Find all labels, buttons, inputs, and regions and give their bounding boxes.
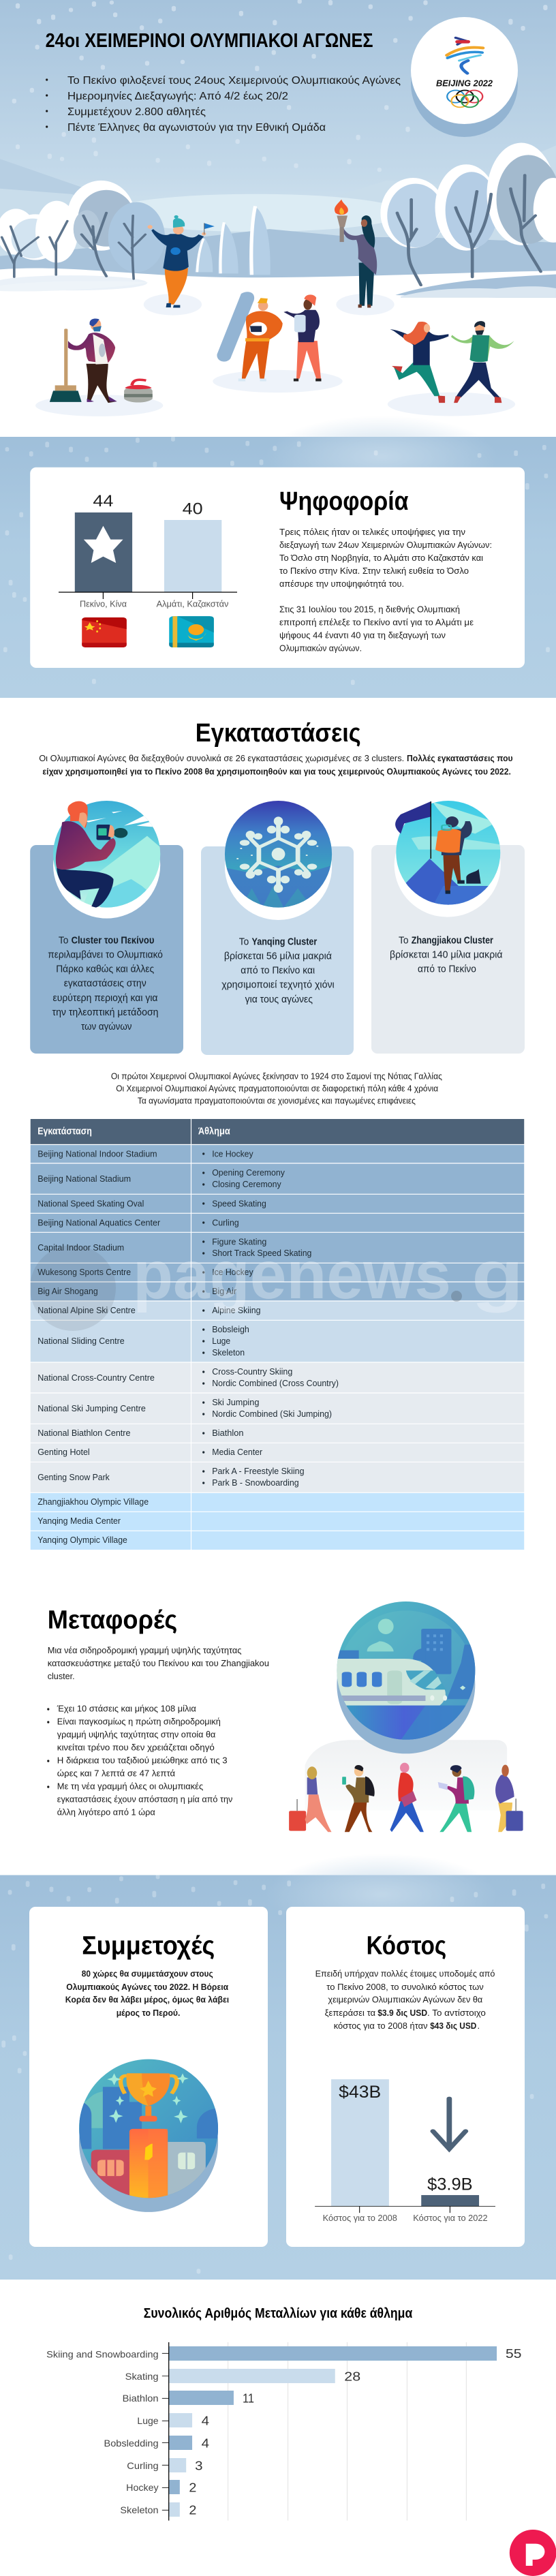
voting card [30,467,525,668]
panel: participation [29,1907,268,2247]
participation text [65,1969,230,2018]
heading: venues: Εγκαταστάσεις [196,719,361,748]
table sports list: Curling [212,1217,239,1227]
cluster card: Beijing [30,801,183,1054]
table sports list: Park B - Snowboarding [212,1477,299,1488]
icon: flag of China [82,617,127,647]
illustration: travellers [289,1763,523,1832]
cost text: . Το αντίστοιχο [427,2008,486,2018]
cluster card: Zhangjiakou [371,801,525,1054]
table sports list: Cross-Country Skiing [212,1366,292,1377]
band background with snow [0,1854,556,2280]
table venue names: National Speed Skating Oval [37,1198,144,1208]
cluster text: Beijing: Cluster του Πεκίνου [72,934,155,946]
cluster text: Beijing: Πάρκο καθώς και άλλες [56,964,154,975]
table sports list: Figure Skating [212,1236,266,1246]
bar chart: cost comparison: $3.9B [427,2175,473,2194]
winter olympics facts [111,1071,442,1106]
bar chart: medals by sport: 11 [243,2391,254,2405]
bar chart: host city vote: 40 [183,500,203,518]
table row backgrounds [30,1119,525,1550]
title: 24οι ΧΕΙΜΕΡΙΝΟΙ ΟΛΥΜΠΙΑΚΟΙ ΑΓΩΝΕΣ [46,30,373,52]
participation and cost section [0,1854,556,2280]
cluster card: Yanqing [201,801,354,1055]
table sports list: Luge [212,1336,230,1346]
cost text: $3.9 δις USD [377,2008,427,2018]
cluster text: Zhangjiakou: Zhangjiakou Cluster [412,934,493,946]
table venue names: Beijing National Stadium [37,1174,131,1184]
table sports list: Ice Hockey [212,1148,253,1159]
table venue names: National Biathlon Centre [37,1428,131,1438]
cluster text: Yanqing: χρησιμοποιεί τεχνητό χιόνι [221,979,335,991]
table header: Εγκατάσταση [37,1126,92,1137]
panel: cost [286,1907,525,2247]
cost text: χειμερινών Ολυμπιακών Αγώνων δεν θα [328,1995,483,2005]
table sports list: Ski Jumping [212,1397,259,1407]
cluster text: Yanqing: για τους αγώνες [245,994,313,1005]
arrow: cost reduction [433,2098,465,2149]
table venue names: Wukesong Sports Centre [37,1267,131,1277]
transport bullets: γραμμή υψηλής ταχύτητας στην οποία θα [57,1730,216,1740]
icon: publisher P logo [510,2530,556,2576]
table header [37,1126,230,1137]
bar chart: medals by sport: Skeleton [120,2504,159,2515]
watermark [30,1245,518,1331]
table sports list: Opening Ceremony [212,1167,285,1178]
bar chart: host city vote: Αλμάτι, Καζακστάν [157,598,229,609]
bar chart: medals by sport: Skating [125,2371,159,2382]
participation text: Ολυμπιακούς Αγώνες του 2022. Η Βόρεια [66,1982,228,1992]
hero scene [0,0,556,423]
bar chart: medals by sport: 55 [506,2347,521,2361]
venues section [30,719,556,1550]
table sports list: Short Track Speed Skating [212,1248,311,1258]
cluster text: Yanqing: Το [239,936,249,947]
transport intro [48,1645,269,1681]
bar chart: medals by sport: Luge [137,2415,159,2426]
heading: transport: Μεταφορές [48,1606,177,1634]
winter olympics facts: Οι Χειμερινοί Ολυμπιακοί Αγώνες πραγματοποιούνται σε διαφορετική πόλη κάθε 4 χρόνια [116,1084,439,1094]
key facts list: Συμμετέχουν 2.800 αθλητές [67,106,206,118]
watermark: pagenews [133,1237,451,1313]
key facts list: Ημερομηνίες Διεξαγωγής: Από 4/2 έως 20/2 [67,91,288,102]
table venue names: Yanqing Olympic Village [37,1535,127,1545]
key facts list: Πέντε Έλληνες θα αγωνιστούν για την Εθνική Ομάδα [67,122,326,134]
cluster text: Zhangjiakou: Το [399,934,409,946]
table sports list: Alpine Skiing [212,1305,260,1315]
cluster text: Beijing: ευρύτερη περιοχή και για [53,992,158,1004]
table sports list: Skeleton [212,1347,245,1358]
voting text [279,527,492,654]
participation text: μέρος το Περού. [117,2008,180,2018]
table venue names: Beijing National Indoor Stadium [37,1148,157,1159]
table venue names: National Ski Jumping Centre [37,1403,146,1413]
table sports list: Park A - Freestyle Skiing [212,1466,304,1476]
Beijing 2022 logo badge: BEIJING 2022 [436,78,493,89]
venues intro text: είχαν χρησιμοποιηθεί για το Πεκίνο 2008 θα χρησιμοποιηθούν και για τους χειμερινούς Ολυμπιακούς Αγώνες του 2022. [42,767,511,777]
table venue names: Zhangjiakhou Olympic Village [37,1497,149,1507]
figure: curler with broom and stone [35,319,163,416]
transport bullets: εγκαταστάσεις έχουν απόσταση η μία από την [57,1794,232,1805]
voting text: απέσυρε την υποψηφιότητά του. [279,579,404,589]
voting text: ψήφους 44 έναντι 40 για τη διεξαγωγή των [279,630,446,641]
icon: Beijing 2022 emblem [447,37,483,74]
table venue names [37,1148,161,1545]
bar chart: cost comparison: Κόστος για το 2008 [323,2213,397,2223]
bar chart: medals by sport: 2 [189,2504,196,2517]
transport intro: Μια νέα σιδηροδρομική γραμμή υψηλής ταχύτητας [48,1645,241,1655]
illustration: high-speed train [305,1601,507,1787]
medals chart section [46,2306,556,2576]
table sports list: Biathlon [212,1428,244,1438]
winter olympics facts: Οι πρώτοι Χειμερινοί Ολυμπιακοί Αγώνες ξεκίνησαν το 1924 στο Σαμονί της Νότιας Γαλλίας [111,1071,442,1082]
bar chart: cost comparison [315,2079,495,2223]
heading: cost: Κόστος [367,1931,446,1960]
voting text: Στις 31 Ιουλίου του 2015, η διεθνής Ολυμπιακή [279,604,460,615]
figure: snowboarders [213,292,343,393]
bar chart: medals by sport [46,2342,521,2521]
bar: Beijing with star [75,512,132,592]
table venue names: National Cross-Country Centre [37,1373,155,1383]
trees left [0,181,271,279]
voting text: επιτροπή επέλεξε το Πεκίνο αντί για το Αλμάτι με [279,617,474,628]
cost text: ξεπεράσει τα [325,2008,376,2018]
Beijing 2022 logo badge [411,17,518,137]
bar chart: medals by sport: 28 [344,2370,360,2383]
bar chart: medals by sport: Hockey [126,2482,159,2493]
participation text: 80 χώρες θα συμμετάσχουν στους [82,1969,213,1979]
bar chart: host city vote [59,492,237,609]
illustration: photographer [53,801,163,919]
transport bullets: Με τη νέα γραμμή όλες οι ολυμπιακές [57,1781,203,1792]
table venue names: Yanqing Media Center [37,1516,121,1526]
participation text: Κορέα δεν θα λάβει μέρος, όμως θα λάβει [65,1995,230,2005]
cluster text: Beijing: των αγώνων [81,1021,132,1032]
hero background landscape [0,0,556,423]
transport bullets: Έχει 10 στάσεις και μήκος 108 μίλια [57,1704,196,1714]
cluster text: Beijing: περιλαμβάνει το Ολυμπιακό [48,949,163,961]
bar chart: medals by sport: 4 [202,2414,209,2427]
cost text: Επειδή υπήρχαν πολλές έτοιμες υποδομές από [315,1969,495,1979]
cluster text: Beijing: Το [59,934,68,946]
transport section [48,1601,523,1832]
table sports list: Big Air [212,1286,237,1296]
voting section [0,416,556,698]
heading: voting: Ψηφοφορία [279,487,409,516]
cluster text: Zhangjiakou: από το Πεκίνο [418,964,476,975]
illustration: snowflake [225,801,332,920]
venues intro text: Πολλές εγκαταστάσεις που [407,753,513,763]
icon: flag of Kazakhstan [169,616,214,647]
transport bullets: άλλη λιγότερο από 1 ώρα [57,1807,155,1818]
bar chart: host city vote: 44 [93,492,113,510]
table sports list: Closing Ceremony [212,1179,281,1189]
key facts list [46,75,401,134]
cost text [315,1969,495,2031]
band background with snow [0,416,556,698]
voting text: Το Όσλο στη Νορβηγία, το Αλμάτι στο Καζακστάν και [279,553,483,563]
cluster text: Yanqing: Yanqing Cluster [252,936,317,947]
voting text: διεξαγωγή των 24ων Χειμερινών Ολυμπιακών Αγώνων: [279,540,492,550]
table venue names: Genting Hotel [37,1447,90,1457]
venues table [30,1119,525,1550]
trees right [380,143,556,285]
bar chart: cost comparison: $43B [339,2083,381,2102]
bar: Almaty [164,520,221,592]
transport bullets: ώρες και 7 λεπτά σε 47 λεπτά [57,1768,176,1779]
cluster text: Zhangjiakou: βρίσκεται 140 μίλια μακριά [390,949,503,961]
table sports list: Nordic Combined (Cross Country) [212,1378,339,1388]
table venue names: National Sliding Centre [37,1336,125,1346]
table header: Άθλημα [198,1126,230,1137]
table venue names: Genting Snow Park [37,1472,110,1482]
cost text: . [477,2021,480,2031]
key facts list: Το Πεκίνο φιλοξενεί τους 24ους Χειμερινούς Ολυμπιακούς Αγώνες [67,75,401,87]
table venue names: Capital Indoor Stadium [37,1242,124,1253]
transport intro: κατασκευάστηκε μεταξύ του Πεκίνου και του Zhangjiakou [48,1658,269,1668]
illustration: trophy on podium [79,2059,218,2212]
icon: Olympic rings [447,90,482,107]
cluster text: Zhangjiakou [390,934,503,975]
transport bullets [48,1704,232,1818]
bar chart: medals by sport: 3 [195,2459,203,2472]
bar chart: medals by sport: Curling [127,2460,159,2471]
table sports list: Speed Skating [212,1198,266,1208]
bar chart: medals by sport: 2 [189,2481,196,2495]
cluster text: Beijing: την τηλεοπτική μετάδοση [52,1007,158,1018]
heading: participation: Συμμετοχές [82,1931,215,1960]
table sports list: Bobsleigh [212,1324,249,1334]
bar chart: medals by sport: Biathlon [123,2393,159,2404]
table sports list: Nordic Combined (Ski Jumping) [212,1409,332,1419]
bar chart: cost comparison: Κόστος για το 2022 [413,2213,488,2223]
voting text: Τρεις πόλεις ήταν οι τελικές υποψήφιες για την [279,527,465,537]
bar chart: medals by sport: Bobsledding [104,2438,159,2449]
heading: medals chart: Συνολικός Αριθμός Μεταλλίων για κάθε άθλημα [144,2306,413,2321]
table sports list: Media Center [212,1447,263,1457]
table sports list [204,1148,339,1488]
bar chart: medals by sport: Skiing and Snowboarding [46,2348,159,2359]
transport bullets: κινείται τρένο που δεν χρειάζεται οδηγό [57,1743,215,1753]
figure: ice dancers [388,321,515,416]
cost text: κόστος για το 2008 ήταν [334,2021,428,2031]
cluster text: Beijing [48,934,163,1032]
table venue names: Big Air Shogang [37,1286,98,1296]
transport bullets: Είναι παγκοσμίως η πρώτη σιδηροδρομική [57,1717,221,1727]
voting text: Ολυμπιακών αγώνων. [279,643,362,654]
table venue names: National Alpine Ski Centre [37,1305,136,1315]
figure: woman with torch [335,200,395,316]
cluster text: Beijing: εγκαταστάσεις στην [64,978,146,990]
transport bullets: Η διάρκεια του ταξιδιού μειώθηκε από τις 3 [57,1755,228,1766]
winter olympics facts: Τα αγωνίσματα πραγματοποιούνται σε χιονισμένες και παγωμένες επιφάνειες [138,1096,416,1106]
bar chart: host city vote: Πεκίνο, Κίνα [80,598,127,609]
table venue names: Beijing National Aquatics Center [37,1217,161,1227]
table sports list: Ice Hockey [212,1267,253,1277]
voting text: το Πεκίνο στην Κίνα. Στην τελική ευθεία το Όσλο [279,566,469,576]
cluster text: Yanqing [221,936,335,1005]
cluster text: Yanqing: βρίσκεται 56 μίλια μακριά [224,951,332,962]
cost text: $43 δις USD [430,2021,476,2031]
cluster text: Yanqing: από το Πεκίνο και [241,965,315,977]
bar chart: medals by sport: 4 [202,2436,209,2450]
cost text: το Πεκίνο 2008, το συνολικό κόστος των [326,1982,484,1992]
transport intro: cluster. [48,1671,75,1681]
illustration: mountaineer [395,801,504,917]
figure: man with flag [144,215,215,316]
venues intro text [39,753,513,777]
venues intro text: Οι Ολυμπιακοί Αγώνες θα διεξαχθούν συνολικά σε 26 εγκαταστάσεις χωρισμένες σε 3 clusters. [39,753,404,763]
watermark: gr [472,1237,556,1313]
